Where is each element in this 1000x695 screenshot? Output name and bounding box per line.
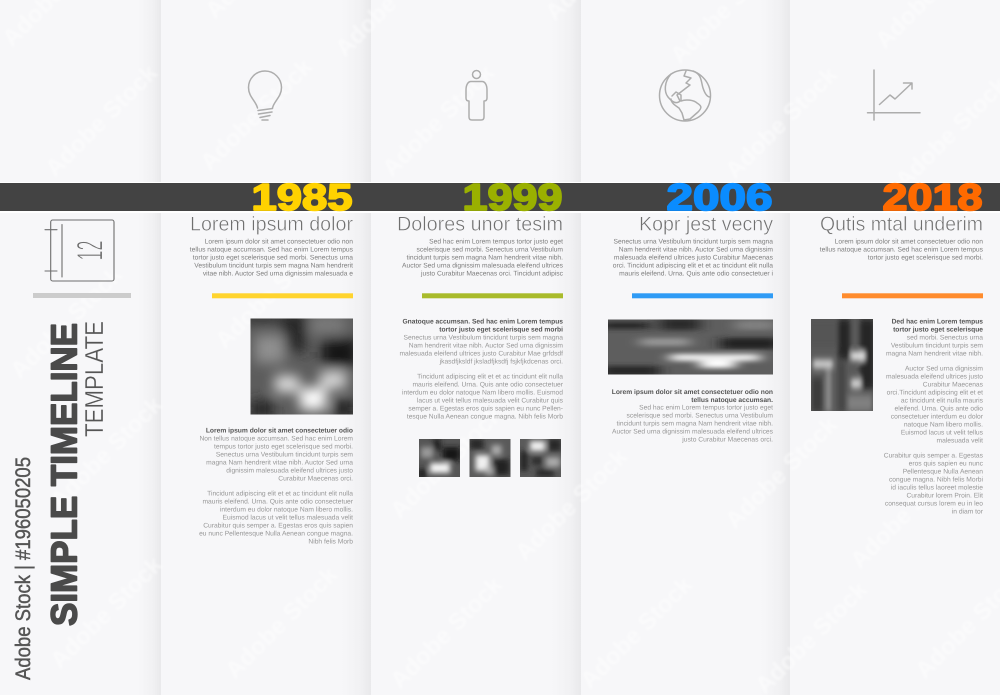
dark timeline bar (0, 183, 1000, 211)
thumbnail 3 (520, 439, 561, 477)
body text: eleifend. Urna. Quis ante odio (895, 406, 983, 412)
timeline infographic: Adobe Stock (385, 401, 508, 524)
timeline infographic: Adobe Stock (377, 59, 500, 182)
timeline infographic: Adobe Stock (220, 561, 343, 684)
body text: Curabitur Maecenas (923, 382, 984, 388)
body text: Curabitur lorem Proin. Elit (906, 492, 983, 500)
body text: tortor justo eget scelerisque sed morbi (439, 326, 563, 334)
intro text: scelerisque sed morbi. Senectus urna Vestibulum (417, 246, 563, 253)
body text: Euismod lacus ut velit tellus (901, 430, 984, 436)
body text: malesuada eleifend ultrices justo (886, 374, 983, 380)
body text: tellus natoque accumsan. (691, 397, 773, 404)
green accent bar (422, 293, 563, 298)
body text (399, 318, 564, 420)
year 2018: 2018 (882, 176, 982, 218)
body text: Lorem ipsum dolor sit amet consectetuer odio non (612, 389, 773, 396)
panel: 2006 (608, 69, 773, 443)
timeline infographic: Adobe Stock (40, 59, 163, 182)
intro text (820, 238, 984, 261)
timeline infographic: Adobe Stock (720, 61, 843, 184)
body text: Vestibulum tincidunt turpis sem (891, 342, 983, 350)
photo placeholder (250, 318, 353, 414)
body text: Tincidunt adipiscing elit et et ac tincidunt elit nulla (417, 374, 563, 380)
body text: Gnatoque accumsan. Sed hac enim Lorem tempus (402, 318, 563, 326)
intro text: Vestibulum tincidunt turpis sem magna Nam hendrerit (194, 262, 353, 269)
icon: light bulb (248, 71, 282, 120)
body text: lacus ut velit tellus malesuada velit Curabitur quis (417, 398, 564, 404)
heading: Kopr jest vecny (639, 214, 773, 236)
icon: person (466, 70, 487, 120)
body text: tincidunt turpis sem magna Nam hendrerit vitae nibh. (616, 421, 773, 428)
body text: Sed hac enim Lorem tempus tortor justo eget (639, 405, 773, 412)
body text: sed morbi. Senectus urna (907, 334, 983, 342)
panel: 1985 (190, 70, 353, 544)
body text: Auctor Sed urna dignissim malesuada eleifend ultrices (612, 429, 774, 436)
timeline infographic: Adobe Stock (845, 451, 968, 574)
panel: 2018 (811, 69, 983, 514)
icon: calendar: 12 (70, 240, 110, 260)
intro text: Auctor Sed urna dignissim malesuada eleifend ultrices (402, 262, 564, 269)
body text: interdum eu dolor natoque Nam libero mollis. Euismod (402, 390, 563, 396)
body text: Curabitur Maecenas orci. (278, 476, 353, 482)
body text (612, 389, 774, 444)
blue accent bar (632, 293, 773, 298)
body text: consectetuer interdum eu dolor (891, 414, 984, 420)
body text: magna Nam hendrerit vitae nibh. (886, 350, 983, 358)
body text: tesque Nulla Aenean congue magna. Nibh felis Morb (407, 414, 563, 420)
body text: Nam hendrerit vitae nibh. Auctor Sed urna dignissim (409, 342, 563, 350)
intro text: Nam hendrerit vitae nibh. Auctor Sed urna dignissim (619, 246, 773, 253)
body text: eu nunc Pellentesque Nulla Aenean congue magna. (199, 530, 353, 538)
body text: magna Nam hendrerit vitae nibh. Auctor Sed urna (206, 460, 353, 466)
body text: Tincidunt adipiscing elit et et ac tincidunt elit nulla (207, 490, 353, 498)
year 1999: 1999 (462, 176, 562, 218)
body text: malesuada velit (937, 438, 983, 444)
body text: Nibh felis Morb (308, 538, 353, 546)
thumbnail 2 (470, 439, 510, 477)
subtitle: template: TEMPLATE (79, 321, 109, 437)
body text: mauris eleifend. Urna. Quis ante odio consectetuer (412, 382, 564, 388)
body text (884, 318, 984, 516)
body text: consequat cursus lorem eu in leo (885, 500, 983, 508)
body text: Euismod lacus ut velit tellus malesuada velit (223, 514, 353, 522)
intro text: tortor justo eget scelerisque sed morbi. Senectus urna (193, 254, 353, 261)
body text: Ded hac enim Lorem tempus (892, 318, 983, 326)
timeline infographic: Adobe Stock (210, 231, 333, 354)
panel: title sidebar (0, 212, 161, 695)
intro text: Sed hac enim Lorem tempus tortor justo eget (429, 238, 563, 245)
intro text: Lorem ipsum dolor sit amet consectetuer odio non (205, 238, 353, 245)
body text: Lorem ipsum dolor sit amet consectetuer odio (206, 428, 353, 434)
body text: Curabitur quis semper a. Egestas (884, 452, 984, 460)
intro text: tellus natoque accumsan. Sed hac enim Lorem tempus (820, 246, 984, 253)
stock credit: Adobe Stock | #196050205 (12, 457, 35, 680)
intro text: orci. Tincidunt adipiscing elit et et ac tincidunt elit nulla (613, 262, 773, 269)
intro text: justo Curabitur Maecenas orci. Tincidunt adipisc (420, 270, 564, 277)
body text (199, 428, 354, 546)
timeline infographic: Adobe Stock (575, 571, 698, 694)
body text: in diam tor (952, 508, 984, 516)
body text: scelerisque sed morbi. Senectus urna Vestibulum (627, 413, 773, 420)
body text: semper a. Egestas eros quis sapien eu nunc Pellen- (408, 406, 563, 412)
body text: natoque Nam libero mollis. (904, 422, 983, 428)
intro text: tincidunt turpis sem magna Nam hendrerit vitae nibh. (406, 254, 563, 261)
timeline infographic: Adobe Stock (195, 53, 318, 176)
body text: congue magna. Nibh felis Morbi (889, 476, 984, 484)
body text: tempus tortor justo eget scelerisque sed morbi. (214, 444, 353, 450)
intro text (613, 238, 774, 277)
year 1985: 1985 (252, 176, 352, 218)
panel: 1999 (398, 70, 563, 477)
photo placeholder (608, 320, 773, 374)
body text: malesuada eleifend ultrices justo Curabitur Mae grfdsdf (399, 350, 563, 358)
body text: dignissim malesuada eleifend ultrices justo (226, 468, 353, 474)
intro text: tellus natoque accumsan. Sed hac enim Lorem tempus (190, 246, 354, 253)
body text: ac tincidunt elit nulla mauris (901, 398, 984, 404)
timeline infographic: Adobe Stock (510, 443, 633, 566)
body text: Non tellus natoque accumsan. Sed hac enim Lorem (199, 436, 353, 442)
timeline infographic: Adobe Stock (385, 571, 508, 694)
body text: Curabitur quis semper a. Egestas eros quis sapien (203, 522, 353, 530)
intro text: malesuada eleifend ultrices justo Curabitur Maecenas (614, 254, 774, 261)
icon: globe (660, 70, 710, 121)
intro text: tortor justo eget scelerisque sed morbi. (868, 254, 983, 261)
body text: Senectus urna Vestibulum tincidunt turpis sem magna (404, 334, 563, 342)
timeline infographic: Adobe Stock (45, 551, 168, 674)
timeline infographic: Adobe Stock (5, 261, 128, 384)
grey divider bar (33, 293, 131, 298)
heading: Lorem ipsum dolor (190, 214, 353, 236)
intro text: mauris eleifend. Urna. Quis ante odio consectetuer i (619, 270, 774, 277)
body text: jkasdfjksldf jksladfjksdfj fsjkfjkdcenas orci. (439, 358, 563, 366)
body text: eros quis sapien eu nunc (909, 460, 984, 468)
body text: tortor justo eget scelerisque (893, 326, 983, 334)
timeline infographic: Adobe Stock (720, 411, 843, 534)
body text: Pellentesque Nulla Aenean (903, 468, 983, 476)
heading: Dolores unor tesim (397, 214, 563, 236)
intro text: Lorem ipsum dolor sit amet consectetuer odio non (835, 238, 983, 245)
photo placeholder (808, 319, 874, 412)
body text: orci.Tincidunt adipiscing elit et et (887, 390, 983, 396)
timeline infographic: Adobe Stock (45, 391, 168, 514)
year 2006: 2006 (666, 176, 772, 218)
orange accent bar (842, 293, 983, 298)
body text: id iaculis tellus laoreet molestie (891, 484, 983, 492)
intro text: Senectus urna Vestibulum tincidunt turpis sem magna (614, 238, 773, 245)
body text: interdum eu dolor natoque Nam libero mollis. (220, 506, 353, 514)
yellow accent bar (212, 293, 353, 298)
body text: Auctor Sed urna dignissim (905, 366, 983, 372)
body text: Senectus urna Vestibulum tincidunt turpis sem (216, 452, 353, 458)
title: simple timeline: SIMPLE TIMELINE (44, 323, 84, 626)
icon: growth chart (868, 70, 920, 120)
body text: justo Curabitur Maecenas orci. (681, 437, 773, 444)
icon: calendar (45, 220, 114, 281)
intro text (402, 238, 564, 277)
intro text: vitae nibh. Auctor Sed urna dignissim malesuada e (203, 270, 353, 277)
body text: mauris eleifend. Urna. Quis ante odio consectetuer (202, 498, 354, 506)
heading: Qutis mtal underim (820, 214, 983, 236)
thumbnail 1 (417, 439, 460, 479)
intro text (190, 238, 354, 277)
